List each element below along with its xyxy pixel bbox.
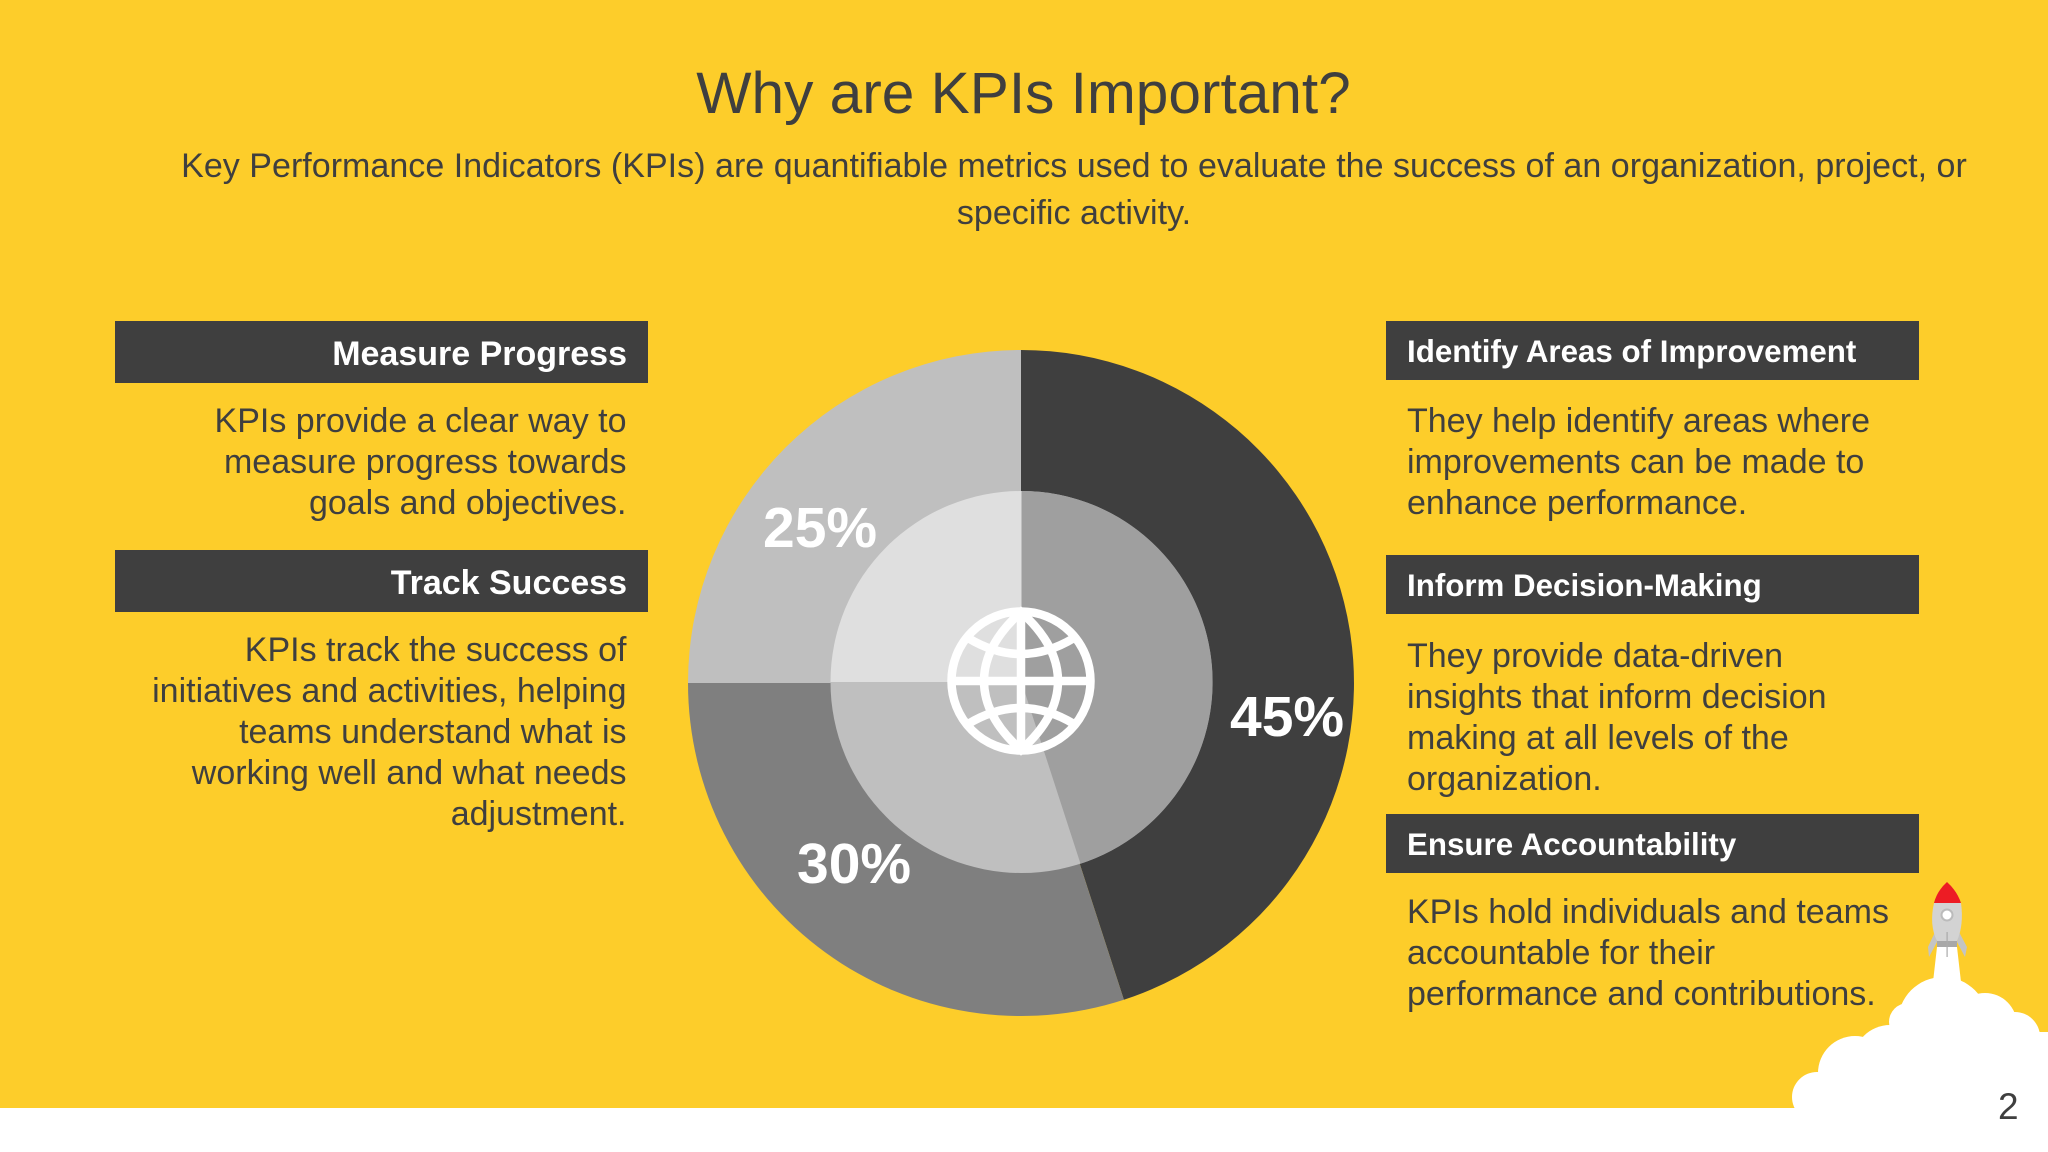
text: Track Success: adjustment. [451,795,626,833]
heading: Track Success [115,550,648,612]
text: Track Success [152,631,626,833]
heading: Inform Decision-Making: Inform Decision-Making [1407,568,1762,603]
text: Ensure Accountability: KPIs hold individuals and teams [1407,893,1889,931]
inner slice 45% [1022,491,1213,864]
heading: Ensure Accountability: Ensure Accountability [1407,827,1736,862]
subtitle: Key Performance Indicators (KPIs) are quantifiable metrics used to evaluate the success of an organization, project, or [181,147,1967,185]
heading: Measure Progress: Measure Progress [332,335,627,373]
cloud [1792,947,2048,1152]
text: Identify Areas: enhance performance. [1407,484,1747,522]
label 45%: 45% [1230,685,1344,749]
text: Inform Decision-Making: insights that inform decision [1407,678,1827,716]
outer slice 30% [688,683,1124,1016]
heading: Identify Areas of Improvement: Identify Areas of Improvement [1407,334,1856,369]
text: Measure Progress: KPIs provide a clear way to [215,402,626,440]
label 30%: 30% [797,832,911,896]
text: Track Success: KPIs track the success of [245,631,626,669]
text: Identify Areas: They help identify areas where [1407,402,1870,440]
text: Ensure Accountability: accountable for their [1407,934,1715,972]
text: Ensure Accountability [1407,893,1889,1013]
inner disc [830,491,1212,873]
text: Identify Areas [1407,402,1870,522]
text: Measure Progress [215,402,626,522]
text: Measure Progress: goals and objectives. [309,484,626,522]
subtitle [181,147,1967,232]
heading: Inform Decision-Making [1386,555,1919,614]
text: Ensure Accountability: performance and contributions. [1407,975,1876,1013]
text: Identify Areas: improvements can be made to [1407,443,1864,481]
heading: Track Success: Track Success [391,564,627,602]
text: Measure Progress: measure progress towards [224,443,626,481]
text: Inform Decision-Making: They provide data-driven [1407,637,1783,675]
text: Inform Decision-Making: making at all levels of the [1407,719,1789,757]
heading: Identify Areas of Improvement [1386,321,1919,380]
outer slice 45% [1021,350,1354,1000]
subtitle: specific activity. [957,194,1191,232]
heading: Ensure Accountability [1386,814,1919,873]
title: Why are KPIs Important? [696,61,1351,126]
inner slice 25% [830,491,1022,682]
text: Inform Decision-Making: organization. [1407,760,1602,798]
heading: Measure Progress [115,321,648,383]
label 25%: 25% [763,496,877,560]
text: Track Success: initiatives and activities, helping [152,672,626,710]
text: Track Success: teams understand what is [239,713,626,751]
rocket [1928,882,1967,957]
outer slice 25% [688,350,1021,683]
text: Inform Decision-Making [1407,637,1827,798]
text: Track Success: working well and what needs [192,754,626,792]
icon: globe [952,612,1090,750]
illustration: rocket and cloud [1792,882,2048,1108]
page number: 2 [1998,1086,2019,1127]
